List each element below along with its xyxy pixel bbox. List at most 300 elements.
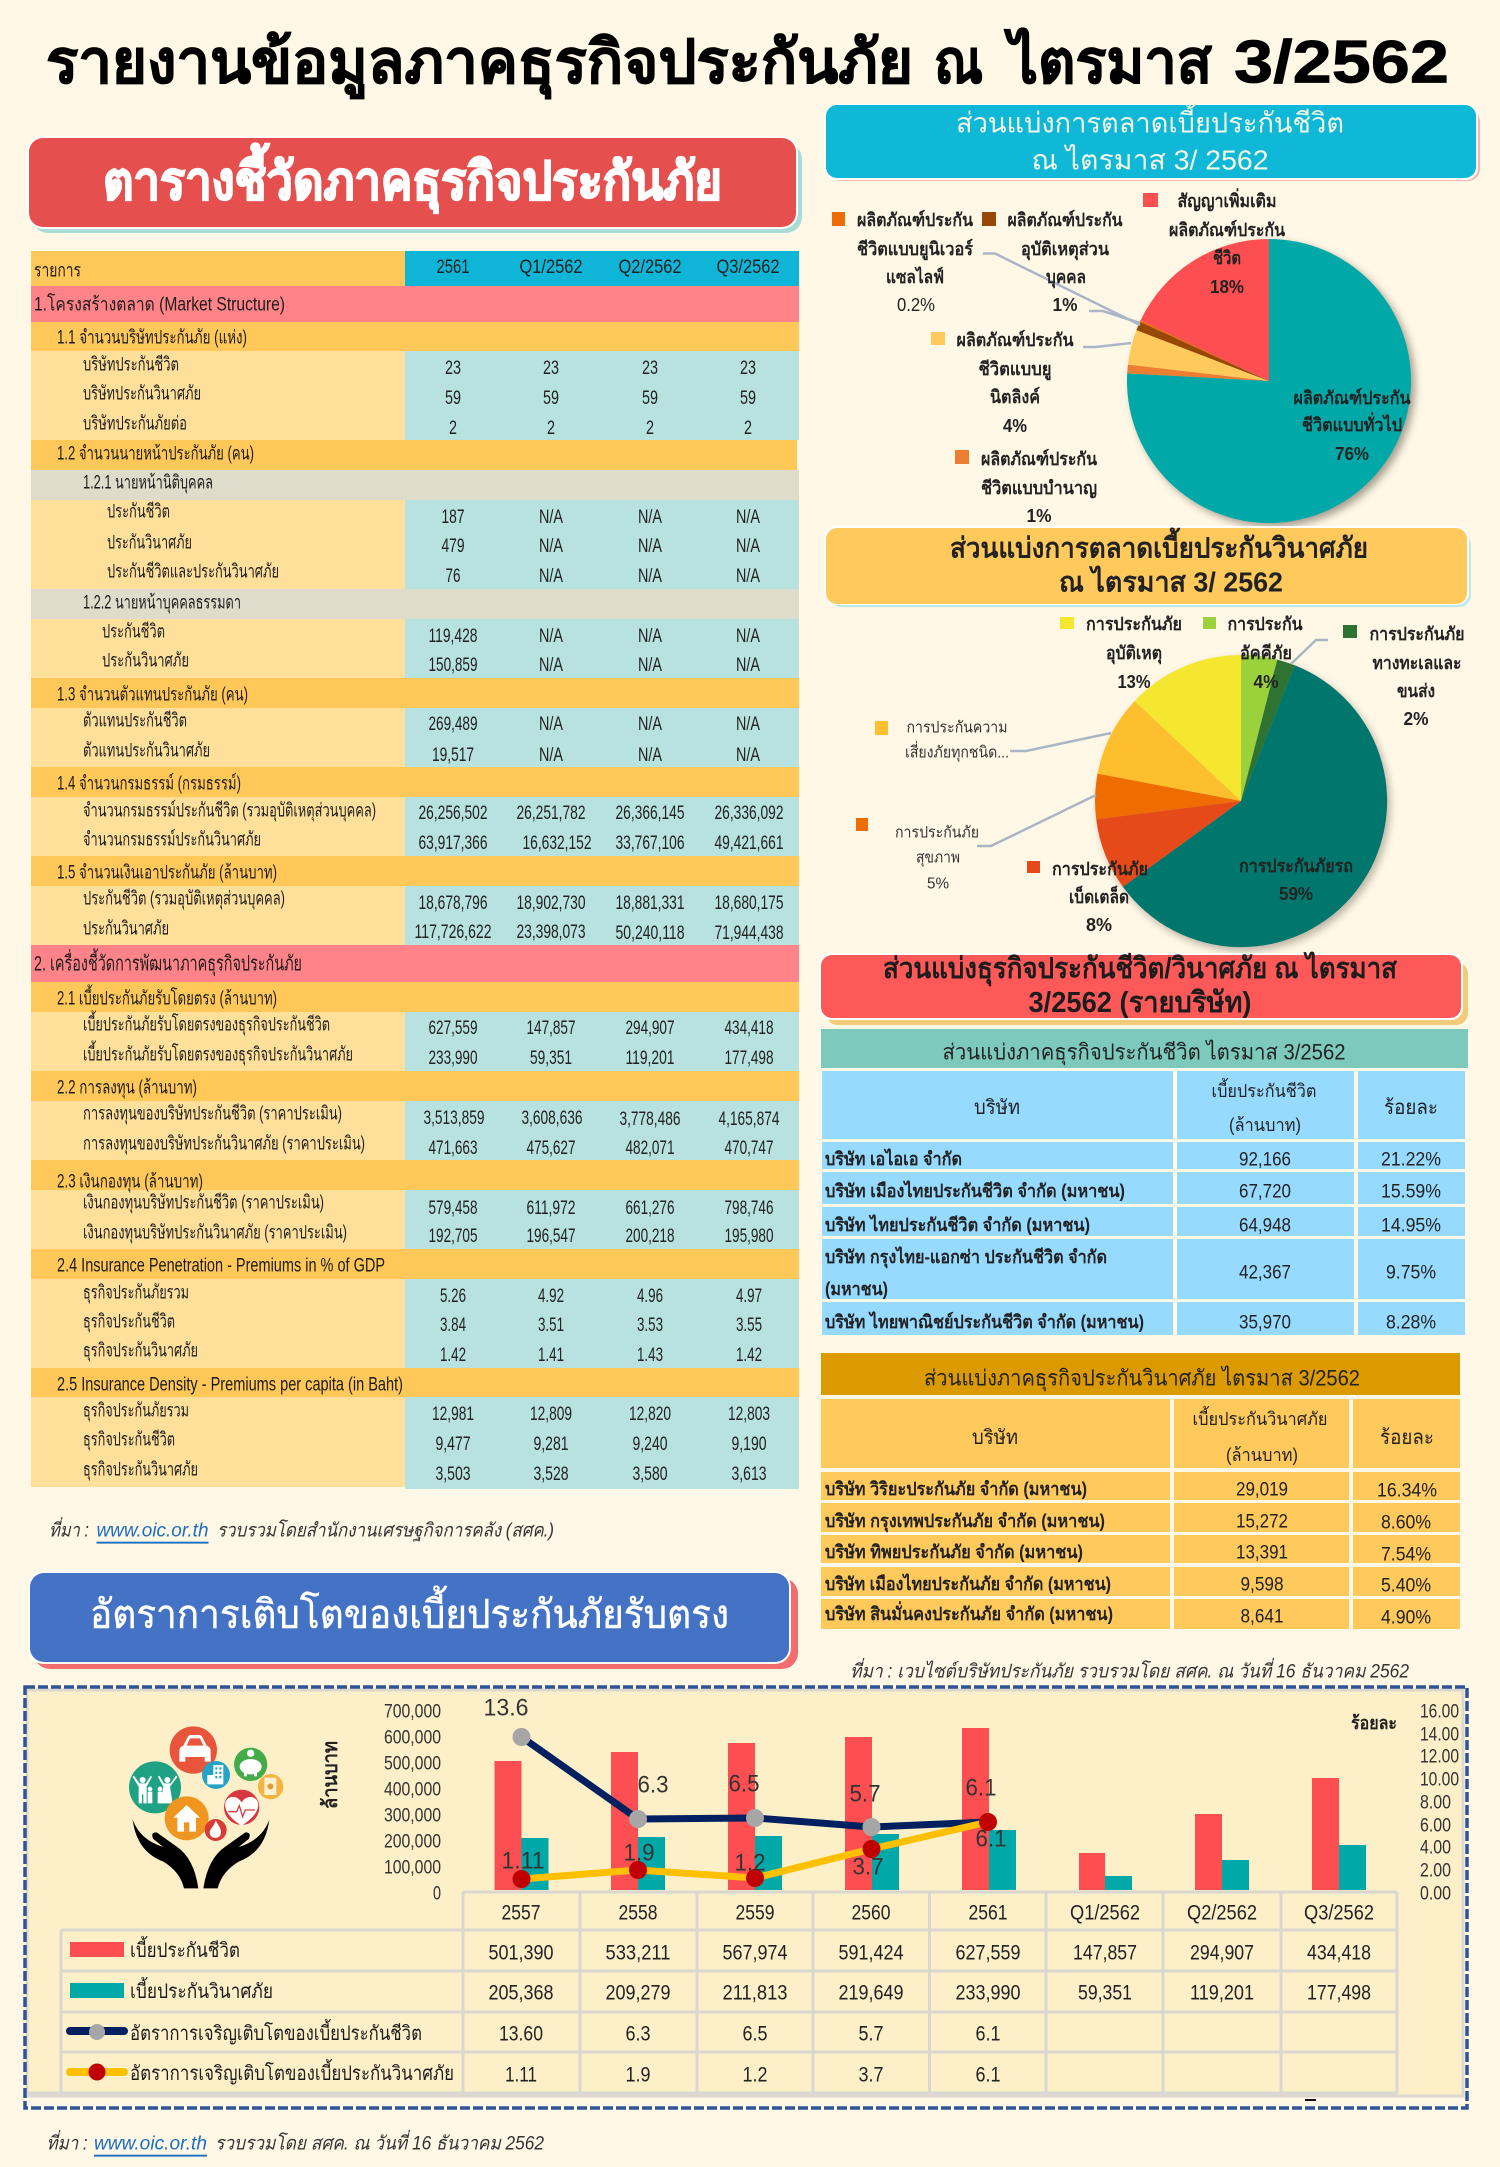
table: non-life insurance companies: ร้อยละ — [1380, 1427, 1434, 1449]
legend: accident: การประกันภัย — [1086, 614, 1182, 634]
panel: indicator table: 12,820 — [629, 1404, 671, 1425]
table: life insurance companies: 14.95% — [1381, 1216, 1441, 1236]
data table: 205,368 — [488, 1982, 554, 2005]
panel: indicator table: N/A — [736, 536, 760, 557]
legend: marine and transport: การประกันภัย — [1370, 624, 1464, 644]
panel: indicator table: 3,528 — [534, 1464, 568, 1485]
table: non-life insurance companies: 16.34% — [1377, 1480, 1437, 1502]
panel: indicator table: 187 — [442, 507, 464, 528]
table: life insurance companies: 92,166 — [1239, 1150, 1291, 1170]
panel: indicator table: 195,980 — [724, 1226, 774, 1247]
right axis: 16.00 — [1420, 1702, 1459, 1723]
panel: indicator table: N/A — [539, 745, 563, 766]
legend: non-life premium: เบี้ยประกันวินาศภัย — [130, 1977, 273, 2003]
data labels: 6.3 — [638, 1772, 668, 1798]
legend: health: สุขภาพ — [916, 850, 960, 868]
table: life insurance companies: 64,948 — [1239, 1216, 1291, 1236]
table: non-life insurance companies — [821, 1353, 1460, 1629]
data table: 1.11 — [505, 2064, 537, 2087]
title — [46, 26, 1449, 100]
panel: indicator table: 50,240,118 — [616, 923, 684, 944]
panel: indicator table: 3.55 — [736, 1315, 762, 1336]
data table: 627,559 — [956, 1942, 1020, 1965]
data table: 3.7 — [858, 2064, 884, 2087]
panel: indicator table: 119,201 — [626, 1048, 674, 1069]
data table: 5.7 — [858, 2023, 884, 2046]
heading: non-life market share banner — [824, 526, 1471, 607]
panel: indicator table: 2561 — [436, 257, 470, 278]
label: ordinary life — [1294, 387, 1411, 464]
legend: miscellaneous: การประกันภัย — [1052, 859, 1148, 879]
legend: life premium: เบี้ยประกันชีวิต — [130, 1936, 240, 1962]
panel: indicator table: 1.2 จำนวนนายหน้าประกันภัย (คน) — [57, 444, 254, 465]
panel: indicator table: ตัวแทนประกันชีวิต — [83, 710, 187, 732]
data labels: 13.6 — [484, 1694, 528, 1722]
data labels: 6.1 — [966, 1774, 996, 1802]
panel: indicator table: 3.84 — [440, 1315, 466, 1336]
legend: annuity — [955, 448, 1098, 526]
panel: indicator table: ธุรกิจประกันภัยรวม — [83, 1401, 189, 1423]
panel: indicator table: 26,256,502 — [418, 803, 488, 824]
heading: indicator table banner: ตารางชี้วัดภาคธุรกิจประกันภัย — [103, 143, 722, 214]
legend: fire — [1203, 614, 1303, 692]
legend: universal life — [832, 209, 974, 315]
panel: indicator table: ธุรกิจประกันวินาศภัย — [83, 1341, 198, 1363]
panel: indicator table: 150,859 — [428, 655, 478, 676]
panel: indicator table: 18,680,175 — [714, 893, 784, 914]
left axis: 300,000 — [384, 1806, 441, 1827]
panel: indicator table: 33,767,106 — [616, 833, 684, 854]
panel: indicator table: 12,809 — [530, 1404, 572, 1425]
title: รายงานข้อมูลภาคธุรกิจประกันภัย — [46, 28, 913, 100]
legend: marine and transport: ทางทะเลและ — [1372, 653, 1462, 673]
panel: indicator table: ประกันชีวิตและประกันวินาศภัย — [107, 561, 279, 583]
data table — [27, 1892, 1397, 2093]
legend: unit linked: ผลิตภัณฑ์ประกัน — [956, 329, 1074, 350]
panel: indicator table: 23 — [740, 358, 756, 379]
panel: indicator table: N/A — [638, 655, 662, 676]
table: non-life insurance companies: 5.40% — [1381, 1576, 1431, 1596]
panel: indicator table: ธุรกิจประกันวินาศภัย — [83, 1460, 198, 1482]
line: non-life premium growth — [512, 1813, 997, 1888]
panel: indicator table: N/A — [539, 566, 563, 587]
panel: indicator table: 192,705 — [428, 1226, 478, 1247]
panel: indicator table: ประกันวินาศภัย — [102, 651, 189, 672]
panel: indicator table: 4,165,874 — [718, 1109, 780, 1130]
heading: company share banner: ส่วนแบ่งธุรกิจประกันชีวิต/วินาศภัย ณ ไตรมาส — [883, 951, 1397, 986]
panel: indicator table: 9,281 — [534, 1434, 568, 1455]
title: ณ — [934, 28, 983, 96]
legend: all risks: เสี่ยงภัยทุกชนิด... — [905, 740, 1009, 762]
panel: indicator table: 59 — [740, 388, 756, 409]
legend: accident: 13% — [1118, 672, 1150, 692]
data table: 434,418 — [1307, 1942, 1371, 1965]
panel: indicator table: N/A — [539, 714, 563, 735]
panel: indicator table: 4.92 — [538, 1286, 564, 1307]
legend: all risks: การประกันความ — [906, 720, 1008, 736]
panel: indicator table: ธุรกิจประกันชีวิต — [83, 1429, 175, 1452]
legend: annuity: 1% — [1026, 506, 1052, 526]
panel: indicator table: 1.41 — [538, 1345, 564, 1366]
panel: indicator table: จำนวนกรมธรรม์ประกันชีวิต (รวมอุบัติเหตุส่วนบุคคล) — [83, 800, 376, 823]
panel: indicator table: 26,336,092 — [714, 803, 784, 824]
table: life insurance companies: 35,970 — [1239, 1312, 1291, 1334]
panel: indicator table: N/A — [539, 536, 563, 557]
table: non-life insurance companies: 8,641 — [1240, 1606, 1284, 1628]
legend: miscellaneous: เบ็ดเตล็ด — [1069, 885, 1129, 907]
panel: indicator table: N/A — [539, 626, 563, 647]
table: life insurance companies: บริษัท กรุงไทย-แอกซ่า ประกันชีวิต จำกัด — [825, 1246, 1107, 1269]
legend: fire: อัคคีภัย — [1240, 643, 1292, 663]
data table: 177,498 — [1307, 1982, 1371, 2005]
table: life insurance companies: บริษัท เมืองไทยประกันชีวิต จำกัด (มหาชน) — [825, 1180, 1125, 1201]
table: non-life insurance companies: 8.60% — [1381, 1512, 1431, 1534]
panel: indicator table: 23,398,073 — [516, 922, 586, 943]
panel: indicator table: บริษัทประกันวินาศภัย — [83, 384, 201, 405]
legend: health — [856, 818, 979, 892]
label: motor: 59% — [1279, 884, 1313, 904]
heading: non-life market share banner: ณ ไตรมาส 3/ 2562 — [1059, 566, 1283, 598]
data labels — [484, 1694, 1006, 1880]
panel: indicator table: N/A — [736, 507, 760, 528]
left axis — [384, 1702, 441, 1905]
data table: 2559 — [736, 1902, 774, 1925]
right axis: 0.00 — [1420, 1884, 1451, 1905]
table: life insurance companies: (ล้านบาท) — [1229, 1115, 1301, 1135]
source note: indicator table: รวบรวมโดยสำนักงานเศรษฐกิจการคลัง (สศค.) — [217, 1519, 554, 1542]
legend: personal accident: ผลิตภัณฑ์ประกัน — [1008, 209, 1123, 230]
panel: indicator table: 23 — [543, 358, 559, 379]
data table: 233,990 — [956, 1982, 1020, 2005]
panel: indicator table: 269,489 — [428, 714, 478, 735]
legend: fire: การประกัน — [1228, 614, 1303, 634]
legend: universal life: ผลิตภัณฑ์ประกัน — [857, 209, 974, 230]
panel: indicator table: บริษัทประกันภัยต่อ — [83, 414, 187, 435]
heading: life insurance market share banner: ณ ไตรมาส 3/ 2562 — [1032, 144, 1268, 176]
left axis: 500,000 — [384, 1754, 441, 1775]
table: non-life insurance companies: บริษัท ทิพยประกันภัย จำกัด (มหาชน) — [825, 1542, 1083, 1562]
panel: indicator table: 5.26 — [440, 1286, 466, 1307]
data table: 2561 — [968, 1902, 1008, 1925]
source note: growth chart — [46, 2130, 544, 2155]
data labels: 1.9 — [624, 1840, 654, 1866]
legend: riders: 18% — [1210, 277, 1244, 297]
right axis: 12.00 — [1420, 1747, 1459, 1768]
table: non-life insurance companies: 13,391 — [1236, 1542, 1288, 1564]
panel: indicator table: 4.97 — [736, 1286, 762, 1307]
panel: indicator table: 434,418 — [724, 1018, 774, 1039]
legend: health: การประกันภัย — [895, 824, 979, 842]
panel: indicator table: 59,351 — [530, 1048, 572, 1069]
source note: indicator table — [49, 1517, 554, 1542]
data table: 1.9 — [626, 2064, 650, 2087]
legend: marine and transport: ขนส่ง — [1397, 681, 1435, 701]
panel: indicator table: N/A — [736, 626, 760, 647]
data table: 2557 — [502, 1902, 540, 1925]
panel: indicator table: 1.1 จำนวนบริษัทประกันภัย (แห่ง) — [57, 328, 247, 349]
data labels: 1.11 — [502, 1848, 544, 1874]
legend: personal accident: บุคคล — [1046, 267, 1086, 289]
panel: indicator table: Q2/2562 — [618, 257, 682, 278]
panel: indicator table: บริษัทประกันชีวิต — [83, 354, 179, 376]
panel: indicator table: 59 — [445, 388, 461, 409]
panel: indicator table: ประกันชีวิต (รวมอุบัติเหตุส่วนบุคคล) — [83, 888, 285, 911]
panel: indicator table: 1.2.2 นายหน้าบุคคลธรรมดา — [83, 593, 241, 615]
panel: indicator table: N/A — [539, 655, 563, 676]
panel: indicator table: เบี้ยประกันภัยรับโดยตรงของธุรกิจประกันวินาศภัย — [83, 1041, 353, 1067]
data table: 6.1 — [976, 2064, 1000, 2087]
label: ordinary life: ชีวิตแบบทั่วไป — [1302, 412, 1402, 435]
data table: 219,649 — [838, 1982, 904, 2005]
table: life insurance companies: เบี้ยประกันชีวิต — [1212, 1078, 1316, 1101]
data table: 2558 — [618, 1902, 658, 1925]
panel: indicator table: การลงทุนของบริษัทประกันชีวิต (ราคาประเมิน) — [83, 1103, 342, 1126]
legend: marine and transport — [1343, 624, 1464, 729]
panel: indicator table: N/A — [736, 566, 760, 587]
panel: indicator table: 2 — [449, 418, 457, 439]
panel: indicator table: 1.43 — [637, 1345, 663, 1366]
panel: indicator table: 4.96 — [637, 1286, 663, 1307]
data table: 591,424 — [838, 1942, 904, 1965]
panel: indicator table: 3,580 — [632, 1464, 668, 1485]
data table: 13.60 — [499, 2023, 543, 2046]
panel: indicator table: 12,981 — [432, 1404, 474, 1425]
data labels: 6.1 — [976, 1826, 1006, 1852]
panel: indicator table: 579,458 — [428, 1198, 478, 1219]
panel: indicator table: 2.3 เงินกองทุน (ล้านบาท) — [57, 1172, 203, 1194]
legend: riders: ชีวิต — [1213, 248, 1241, 268]
panel: indicator table: 119,428 — [428, 626, 478, 647]
data table: 119,201 — [1190, 1982, 1254, 2005]
panel: indicator table: N/A — [638, 745, 662, 766]
panel: indicator table: 23 — [445, 358, 461, 379]
panel: indicator table: N/A — [736, 714, 760, 735]
data table: Q3/2562 — [1304, 1902, 1374, 1925]
table: life insurance companies: 21.22% — [1381, 1150, 1441, 1170]
table: life insurance companies: บริษัท — [974, 1097, 1020, 1119]
panel: indicator table: Q1/2562 — [520, 257, 582, 278]
icon: insurance hands and circles — [129, 1726, 283, 1888]
panel: indicator table: 59 — [642, 388, 658, 409]
panel: indicator table: 2 — [646, 418, 654, 439]
panel: indicator table: ประกันชีวิต — [102, 621, 165, 643]
panel: indicator table: ตัวแทนประกันวินาศภัย — [83, 741, 210, 762]
heading: life insurance market share banner: ส่วนแบ่งการตลาดเบี้ยประกันชีวิต — [956, 102, 1344, 138]
panel: indicator table: 12,803 — [728, 1404, 770, 1425]
panel: indicator table: 798,746 — [724, 1198, 774, 1219]
panel: indicator table: 59 — [543, 388, 559, 409]
legend: unit linked: ชีวิตแบบยู — [978, 359, 1052, 381]
legend: miscellaneous — [1027, 859, 1148, 935]
panel: indicator table: 1.42 — [440, 1345, 466, 1366]
table: non-life insurance companies: เบี้ยประกันวินาศภัย — [1192, 1406, 1328, 1429]
panel: indicator table: N/A — [638, 566, 662, 587]
line: life premium growth — [512, 1728, 988, 1836]
label: motor: การประกันภัยรถ — [1239, 856, 1353, 876]
source note: indicator table: ที่มา : — [49, 1517, 89, 1542]
data table: 209,279 — [606, 1982, 670, 2005]
legend: all risks — [875, 720, 1009, 762]
legend: personal accident: 1% — [1052, 295, 1078, 315]
pie chart: non-life market share — [856, 614, 1464, 947]
legend: non-life growth rate: อัตราการเจริญเติบโตของเบี้ยประกันวินาศภัย — [130, 2059, 454, 2085]
data labels: 6.5 — [728, 1770, 760, 1798]
data table: 59,351 — [1078, 1982, 1132, 2005]
legend: annuity: ชีวิตแบบบำนาญ — [981, 478, 1097, 499]
panel: indicator table: เงินกองทุนบริษัทประกันชีวิต (ราคาประเมิน) — [83, 1192, 324, 1215]
legend: life growth rate: อัตราการเจริญเติบโตของเบี้ยประกันชีวิต — [130, 2019, 422, 2045]
panel: indicator table: 233,990 — [428, 1048, 478, 1069]
legend: non-life growth rate — [70, 2059, 454, 2085]
legend: miscellaneous: 8% — [1086, 915, 1112, 935]
panel: indicator table: ประกันวินาศภัย — [107, 533, 192, 554]
legend: personal accident: อุบัติเหตุส่วน — [1021, 239, 1110, 261]
panel: indicator table: จำนวนกรมธรรม์ประกันวินาศภัย — [83, 829, 261, 851]
data table: 147,857 — [1073, 1942, 1137, 1965]
data table: 2560 — [852, 1902, 890, 1925]
data table: 6.3 — [626, 2023, 650, 2046]
legend: universal life: 0.2% — [897, 295, 935, 315]
panel: indicator table: 3,608,636 — [522, 1108, 582, 1129]
panel: indicator table: ประกันวินาศภัย — [83, 919, 169, 940]
table: life insurance companies: บริษัท ไทยพาณิชย์ประกันชีวิต จำกัด (มหาชน) — [825, 1311, 1144, 1332]
panel: indicator table: 1.3 จำนวนตัวแทนประกันภัย (คน) — [57, 685, 248, 706]
data table: 1.2 — [742, 2064, 768, 2087]
panel: indicator table: N/A — [638, 507, 662, 528]
table: non-life insurance companies: (ล้านบาท) — [1226, 1445, 1298, 1465]
data table: 501,390 — [488, 1942, 554, 1965]
legend: riders: ผลิตภัณฑ์ประกัน — [1169, 219, 1286, 240]
pie chart: life insurance market share — [832, 188, 1411, 526]
panel: indicator table: 26,366,145 — [616, 803, 684, 824]
panel: indicator table: N/A — [638, 626, 662, 647]
legend: universal life: แซลไลฟ์ — [886, 266, 944, 287]
panel: indicator table: 3,613 — [732, 1464, 766, 1485]
data table: 567,974 — [722, 1942, 788, 1965]
panel: indicator table: 627,559 — [428, 1018, 478, 1039]
panel: indicator table: Q3/2562 — [716, 257, 780, 278]
panel: indicator table: 2. เครื่องชี้วัดการพัฒนาภาคธุรกิจประกันภัย — [34, 949, 302, 977]
data labels: 5.7 — [850, 1780, 880, 1808]
table: life insurance companies: บริษัท ไทยประกันชีวิต จำกัด (มหาชน) — [825, 1214, 1090, 1235]
table: life insurance companies: ส่วนแบ่งภาคธุรกิจประกันชีวิต ไตรมาส 3/2562 — [942, 1040, 1346, 1066]
panel: indicator table: 76 — [446, 566, 460, 587]
data table: Q1/2562 — [1070, 1902, 1140, 1925]
panel: indicator table: 1.5 จำนวนเงินเอาประกันภัย (ล้านบาท) — [57, 863, 277, 884]
left axis: 0 — [433, 1884, 441, 1905]
source note: indicator table: www.oic.or.th — [96, 1521, 208, 1542]
panel: indicator table: 196,547 — [526, 1226, 576, 1247]
label: ordinary life: ผลิตภัณฑ์ประกัน — [1294, 387, 1411, 408]
panel: indicator table: 71,944,438 — [714, 923, 784, 944]
table: non-life insurance companies: บริษัท เมืองไทยประกันภัย จำกัด (มหาชน) — [825, 1573, 1111, 1594]
panel: indicator table: 18,902,730 — [516, 893, 586, 914]
left axis: 200,000 — [384, 1832, 441, 1853]
heading: company share banner: 3/2562 (รายบริษัท) — [1028, 987, 1252, 1019]
heading: growth rate banner: อัตราการเติบโตของเบี้ยประกันภัยรับตรง — [90, 1585, 729, 1637]
panel: indicator table: 2.4 Insurance Penetration - Premiums in % of GDP — [57, 1256, 385, 1277]
panel: indicator table: 63,917,366 — [418, 833, 488, 854]
label: motor — [1239, 856, 1353, 904]
panel: indicator table: 3,503 — [436, 1464, 470, 1485]
table: life insurance companies: 42,367 — [1239, 1262, 1291, 1284]
bars: non-life premiums — [522, 1830, 1366, 1890]
right axis: 6.00 — [1420, 1816, 1451, 1837]
table: life insurance companies: (มหาชน) — [825, 1279, 888, 1299]
panel: indicator table: 1.2.1 นายหน้านิติบุคคล — [83, 473, 213, 495]
heading: life insurance market share banner — [824, 102, 1480, 181]
panel: indicator table: 661,276 — [626, 1198, 674, 1219]
panel: indicator table: ธุรกิจประกันภัยรวม — [83, 1283, 189, 1305]
heading: indicator table banner — [27, 136, 802, 233]
panel: indicator table: 3,778,486 — [620, 1109, 680, 1130]
panel: indicator table: 611,972 — [526, 1198, 576, 1219]
panel: indicator table: 475,627 — [526, 1138, 576, 1159]
panel: indicator table: การลงทุนของบริษัทประกันวินาศภัย (ราคาประเมิน) — [83, 1134, 365, 1156]
legend: non-life premium — [70, 1977, 273, 2003]
panel: indicator table: 18,678,796 — [418, 893, 488, 914]
panel: indicator table: รายการ — [34, 261, 81, 282]
source note: growth chart: www.oic.or.th — [94, 2134, 207, 2155]
panel: indicator table — [31, 251, 799, 1489]
legend: life growth rate — [70, 2019, 422, 2045]
axis label: percent: ร้อยละ — [1351, 1713, 1397, 1733]
panel: indicator table: 3.51 — [538, 1315, 564, 1336]
panel: indicator table: 18,881,331 — [616, 893, 684, 914]
right axis: 4.00 — [1420, 1838, 1451, 1859]
table: life insurance companies — [821, 1029, 1468, 1335]
left axis: 100,000 — [384, 1858, 441, 1879]
table: non-life insurance companies: 7.54% — [1381, 1544, 1431, 1566]
data table: 294,907 — [1190, 1942, 1254, 1965]
panel: indicator table: N/A — [736, 745, 760, 766]
panel: indicator table: 117,726,622 — [414, 922, 492, 943]
panel: indicator table: 470,747 — [724, 1138, 774, 1159]
axis label: million baht: ล้านบาท — [319, 1741, 342, 1809]
heading: growth rate banner — [28, 1571, 798, 1669]
data table: 211,813 — [722, 1982, 788, 2005]
source note: growth chart: ที่มา : — [46, 2130, 88, 2155]
source note: growth chart: รวบรวมโดย สศค. ณ วันที่ 16 ธันวาคม 2562 — [215, 2130, 544, 2155]
panel: indicator table: เงินกองทุนบริษัทประกันวินาศภัย (ราคาประเมิน) — [83, 1223, 347, 1245]
data table: Q2/2562 — [1187, 1902, 1257, 1925]
legend: fire: 4% — [1254, 672, 1278, 692]
table: non-life insurance companies: 9,598 — [1240, 1574, 1284, 1596]
left axis: 700,000 — [384, 1702, 441, 1723]
table: non-life insurance companies: 15,272 — [1236, 1512, 1288, 1532]
table: non-life insurance companies: บริษัท กรุงเทพประกันภัย จำกัด (มหาชน) — [825, 1511, 1105, 1533]
legend: annuity: ผลิตภัณฑ์ประกัน — [981, 448, 1098, 469]
panel: indicator table: 2 — [744, 418, 752, 439]
panel: indicator table: 1.โครงสร้างตลาด (Market Structure) — [34, 293, 285, 316]
panel: indicator table: N/A — [638, 714, 662, 735]
legend: riders — [1143, 188, 1286, 297]
panel: indicator table: 26,251,782 — [516, 803, 586, 824]
source note: company tables: ที่มา : เวบไซต์บริษัทประกันภัย รวบรวมโดย สศค. ณ วันที่ 16 ธันวาคม 2562 — [850, 1658, 1409, 1683]
data labels: 3.7 — [852, 1854, 884, 1880]
table: non-life insurance companies: บริษัท สินมั่นคงประกันภัย จำกัด (มหาชน) — [825, 1601, 1113, 1624]
panel: indicator table: 1.42 — [736, 1345, 762, 1366]
table: life insurance companies: ร้อยละ — [1384, 1097, 1438, 1119]
right axis: 8.00 — [1420, 1793, 1451, 1814]
legend: unit linked — [931, 329, 1074, 436]
panel: indicator table: ธุรกิจประกันชีวิต — [83, 1311, 175, 1334]
panel: indicator table: N/A — [638, 536, 662, 557]
panel: indicator table: 200,218 — [626, 1226, 674, 1247]
legend: accident — [1060, 614, 1182, 692]
panel: indicator table: 3,513,859 — [424, 1108, 484, 1129]
heading: company share banner — [819, 951, 1468, 1025]
